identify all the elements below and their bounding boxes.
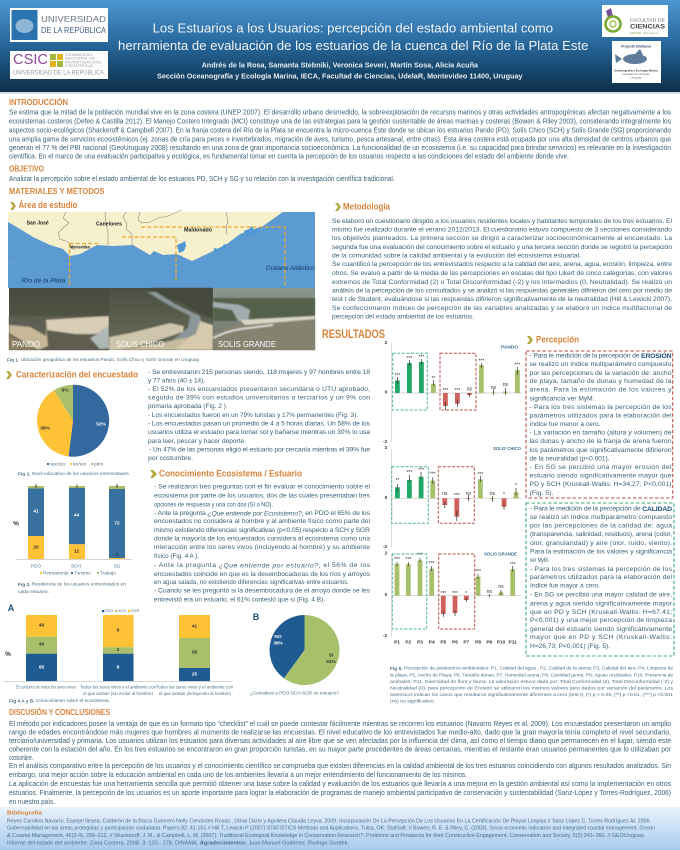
heading: Percepción: Percepción (536, 334, 579, 346)
axis labels: P1 to P11: P6 (452, 640, 458, 646)
panel: percepción de calidad: (transparencia, salinidad, residuos), arena (color, (530, 531, 672, 538)
logo: CSIC: CSIC (13, 52, 48, 68)
axis labels: P1 to P11: P8 (475, 640, 481, 646)
text block: conocimiento: físico (Fig. 4 A ). (154, 553, 199, 560)
bar chart: Fig 5 Solis Chico: ns (442, 491, 448, 497)
text block: conocimiento: interacción entre los seres vivos (incluyendo al hombre) y su ambiente (154, 544, 370, 551)
stacked bar chart: Fig 4 A: 56 (192, 650, 197, 656)
pie chart: Fig 4 B: 61% (326, 659, 337, 665)
title (118, 20, 588, 53)
panel: percepción de erosión: índice fue menor a cero. (530, 421, 601, 428)
panel: percepción de calidad: P<0,001) y una mejor percepción de limpieza (530, 617, 672, 624)
text block: metodología: test t de Student, evaluándose si las respuestas difirieron significativamente de la neutralidad (Hill & Lewicki 2007). (332, 296, 672, 303)
bar chart: Fig 5 Solis Grande: * (465, 591, 467, 597)
stacked bar chart: Fig 4 A: 65 (39, 664, 44, 670)
heading: bibliografía: Bibliografía (7, 810, 43, 816)
text block: introducción (9, 108, 671, 160)
caption: Fig 5: Neutralidad (0), para percepción de Erosión se utilizaron los mismos valores pero dados por variación del parámetro. Los (390, 686, 674, 690)
axis labels: P1 to P11: P9 (486, 640, 493, 646)
bar chart: Fig 3 residencia: 1 (116, 552, 119, 558)
text block: metodología (332, 218, 673, 320)
caption: Fig 1: Fig 1. Ubicación geográfica de los estuarios Pando, Solís Chico y Solís Grande en Uruguay. (7, 357, 200, 362)
caption: Fig 2: Fig 2. Nivel educativo de los usuarios entrevistados. (18, 471, 130, 476)
text block: metodología: Se elaboró un cuestionario dirigido a los usuarios residentes locales y habitantes temporales de los tres estuarios. El (332, 218, 672, 225)
panel: percepción de erosión: - En SG se percibió una mayor erosión del (530, 464, 672, 471)
pie chart: Fig 4 B: ¿Considera a PDO-SCH-SGR un estuario? (250, 690, 339, 696)
bar chart: Fig 3 residencia: 12 (74, 548, 79, 554)
text block: introducción: científica. En el marco de una evaluación participativa y ecológica, es fundamental tomar en cuenta la percepción de los usuarios respecto a las condiciones del estado del ambiente donde vive. (9, 152, 569, 160)
heading: Metodología: Metodología (343, 202, 391, 212)
axis labels: P1 to P11: P10 (497, 640, 506, 646)
bar chart: Fig 5 Solis Grande: 0 (385, 592, 388, 598)
bar chart: Fig 5 Pando: *** (454, 388, 460, 394)
bar chart: Fig 5 Pando: ns (503, 382, 509, 388)
logo: Universidad de la República: UNIVERSIDAD (41, 14, 106, 24)
bar chart: Fig 5 Pando (383, 340, 522, 445)
panel: percepción de calidad: que en PD y SCH (Kruskall-Wallis: H=67,41; (530, 609, 672, 616)
panel: percepción de calidad: mayor que en PD y SCH (Kruskall-Wallis: (530, 634, 672, 641)
text block: conocimiento (154, 484, 371, 604)
text block: conocimiento: opciones de respuesta y una con dos (SI o NO). (154, 502, 273, 508)
category labels: Fig 4 A (16, 684, 233, 696)
panel: percepción de calidad: - Para los tres sistemas la percepción de los (530, 566, 673, 573)
panel: percepción de erosión: PD y SCH (Kruskall-Wallis: H=34,27; P<0,001) (530, 481, 672, 488)
logo: Facultad de Ciencias: CIENCIAS (630, 24, 665, 30)
text block: metodología: Se confeccionaron índices de percepción de las variables analizadas y se elaboró un índice multifactorial de (332, 305, 672, 312)
panel: percepción de erosión: arena. Para la estimación de los valores y (530, 386, 672, 394)
bar chart: Fig 5 Solis Grande: -2 (383, 633, 387, 639)
panel: percepción de erosión: por las percepciones de la variación de: ancho (530, 370, 672, 377)
bar chart: Fig 5 Pando: ns (467, 386, 473, 392)
bar chart: Fig 5 Solis Chico: * (503, 492, 505, 498)
bar chart: Fig 5 Solis Chico: *** (418, 468, 424, 474)
text block: metodología: de la comunidad sobre la calidad ambiental y la evolución del ecosistema estuarial. (332, 252, 581, 260)
text block: references: Informe del estado del ambiente. Zona Costera. 2008. 3: 120 - 176, DINAMA. Agradecimientos: Juan Manuel Gutiérrez, Rodrigo Gurdek. (7, 840, 349, 846)
text block: conocimiento: - Ante la pregunta ¿Que entiende por Ecosistemo?, en PDO el 65% de los (154, 510, 371, 517)
logo: CSIC (10, 51, 108, 79)
bar chart: Fig 3 residencia: 72 (114, 520, 120, 526)
panel: percepción de erosión: las dunas y ancho de la franja de arena fueron (530, 438, 672, 445)
caption: Fig 5: Fig 5. Percepción de parámetros ambientales: P1, Calidad del agua ; P2, Calidad de la arena; P3, Calidad del aire; P4, Limpieza de (390, 666, 673, 670)
panel: percepción de calidad: por las percepciones de la calidad de: agua (530, 522, 672, 530)
logo: Facultad de Ciencias (602, 5, 668, 37)
category labels: Fig 4 A: Todos los seres vivos y el ambiente con (156, 684, 233, 690)
panel: percepción de calidad: Para la estimación de los valores y significancia (530, 548, 672, 556)
stacked bar chart: Fig 4 A (4, 603, 233, 696)
bar chart: Fig 5 Pando: 0 (385, 390, 388, 396)
legend: pie: sec/utu (50, 462, 66, 466)
bar chart: Fig 5 Solis Chico (383, 445, 522, 550)
bar chart: Fig 5 Pando: *** (442, 388, 448, 394)
text block: caracterización: - Los encuestados fueron en un 79% turistas y 17% permanentes (Fig. 3). (148, 412, 358, 419)
text block: caracterización: y 77 años (40 ± 14). (148, 378, 205, 384)
heading: Caracterización del encuestado: Caracterización del encuestado (16, 370, 138, 380)
logo: CSIC: UNIVERSIDAD DE LA REPÚBLICA (13, 70, 104, 76)
authors and affiliation: Andrés de la Rosa, Samanta Stebniki, Veronica Severi, Martín Sosa, Alicia Acuña (202, 60, 479, 70)
legend: Fig 3 (40, 570, 116, 576)
bar chart: Fig 5 Solis Chico: *** (430, 472, 436, 478)
stacked bar chart: Fig 4 A: 2 (117, 647, 120, 653)
bar chart: Fig 5 Solis Grande: *** (440, 591, 446, 597)
logo: Proyecto fish: Uruguay (631, 76, 642, 80)
caption: Fig 5 (390, 666, 674, 704)
logo: Proyecto fish: Oceanografía y Ecología Marina (614, 68, 658, 72)
bar chart: Fig 3 residencia: 3 (116, 484, 119, 490)
stacked bar chart: Fig 4 A: 9 (117, 628, 120, 634)
text block: discusión: embargo, una mejor acción sobre la educación ambiental en cada uno de los ambientes llevaría a un mejor entendimiento del funcionamiento de los mismos. (9, 770, 467, 779)
category labels: Fig 4 A: el que actúan (incluyendo al hombre) (159, 691, 231, 696)
bar chart: Fig 5 Solis Chico: * (515, 483, 517, 489)
logo: CSIC: SECTORIAL DE (65, 57, 96, 61)
bar chart: Fig 3 residencia: SCH (71, 564, 81, 568)
text block: references (7, 818, 655, 846)
bar chart: Fig 5 Solis Grande: *** (475, 569, 481, 575)
bar chart: Fig 5 Solis Chico: *** (477, 472, 483, 478)
text block: references: Reyes Carolina Navarro, Espejel Ileana, Calderón de la Barca Guerrero Nelly Cervantes Rosas , Omar Darío y Aguilera Claudia Leyva. 2009. Incorporación De La Percepción De Los Usuarios En La Certificación De Playas Limpias // Sanz López C, Torres Rodríguez AI. 2006. (7, 818, 651, 824)
text block: caracterización: por costumbre. (148, 455, 193, 462)
panel: percepción de calidad: olor, granularidad) y aire (olor, ruido, viento). (530, 540, 672, 547)
text block: caracterización: seguido de 39% con estudios universitarios o terciarios y un 9% con (148, 394, 370, 402)
heading: Introducción: INTRODUCCIÓN (9, 96, 68, 107)
bar chart: Fig 3 residencia: 2 (35, 484, 38, 490)
caption: Fig 5: asteriscos indican los casos que resultaron significativamente diferentes a cero (test-t). (*) p < 0.05; (**) p <0.01; (***) p <0.001 (390, 692, 673, 697)
panel: percepción de erosión: de playa, tamaño de dunas y humedad de la (530, 378, 672, 385)
bar chart: Fig 5 Solis Chico: ** (395, 478, 399, 484)
text block: conocimiento: - Cuando se les preguntó si la desembocadura de el arroyo donde se les (154, 588, 371, 594)
caption: Fig 5: la playa; P5, Ancho de Playa; P6, Tamaño dunas; P7, Humedad arena; P8, Cantidad gente; P9, Aguas residuales; P10, Presencia de (390, 672, 673, 678)
bar chart: Fig 5 Solis Grande: *** (394, 557, 400, 563)
bar chart: Fig 5 Solis Grande: ns (487, 589, 492, 595)
photo: Solis Chico (109, 288, 213, 350)
text block: caracterización: - Un 47% de las personas eligió el estuario por cercanía mientras el 39% fue (149, 446, 370, 454)
text block: conocimiento: donde la mayoría de los encuestados considera al ecosistema como una (154, 536, 370, 542)
bar chart: Fig 5 Solis Chico: ns (466, 491, 472, 497)
caption: Fig 3: cada estuario. (18, 589, 49, 594)
bar chart: Fig 3 residencia: 41 (33, 508, 39, 514)
axis labels: P1 to P11: P11 (509, 640, 517, 646)
text block: metodología: mismo fue realizado durante el verano 2012/2013. El cuestionario estuvo compuesto de 3 secciones considerando (332, 226, 672, 234)
bar chart: Fig 5 Pando: *** (418, 354, 424, 360)
legend: pie: ter/uni (73, 462, 86, 466)
panel: percepción de erosión: los parámetros que significativamente difirieron (530, 447, 672, 454)
logo: Proyecto fish: Proyecto Ictiofauna (621, 44, 651, 48)
text block: conocimiento: encuestados no considera al hombre y al ambiente físico como parte del (154, 518, 370, 525)
bar chart: Fig 5 Solis Grande: SOLIS GRANDE (484, 552, 518, 558)
bar chart: Fig 5 Solis Grande: *** (429, 561, 435, 567)
panel: bibliografía (0, 807, 680, 850)
axis labels: P1 to P11: P4 (429, 640, 435, 646)
text block: metodología: los objetivos planteados. La primera sección se dirigió a caracterizar socioeconómicamente al encuestado. La (332, 235, 672, 242)
text block: conocimiento: mismo existiendo diferencias significativas (p<0.05) respecto a SCH y SGR (154, 527, 370, 534)
text block: conocimiento: encuestados coincide en que es la desembocaduras de los ríos y arroyos (154, 571, 371, 578)
logo: CSIC: COMISIÓN (65, 52, 93, 57)
pie chart: nivel educativo: 52% (96, 422, 107, 428)
text block: metodología: análisis de la percepción de los consultados y se analizó si las respuestas generales difirieron del cero por medio de (332, 288, 672, 294)
bar chart: Fig 5 Solis Grande (383, 550, 522, 646)
title: herramienta de evaluación de los estuarios de la cuenca del Río de la Plata Este (118, 38, 588, 53)
panel: percepción de calidad: índice fue mayor a cero. (530, 582, 600, 590)
stacked bar chart: Fig 4 A: 41 (192, 624, 197, 630)
panel: percepción de erosión: parámetros utilizados para la elaboración del (530, 412, 672, 420)
text block: conocimiento: - Se realizaron tres preguntas con el fin evaluar el conocimiento sobre el (154, 484, 370, 490)
legend: pie: prim (94, 462, 103, 466)
text block: conocimiento: en agua salada, no existiendo diferencias significativas entre estuarios. (154, 579, 349, 586)
legend: Fig 3: Turismo (74, 570, 91, 576)
pie chart: Fig 4 B: NO (274, 634, 282, 640)
photo labels (12, 339, 276, 349)
bar chart: Fig 5 Solis Grande: *** (452, 591, 458, 597)
bar chart: Fig 3 residencia (13, 484, 132, 576)
text block: caracterización: para leer, pescar y hacer deporte. (148, 438, 246, 445)
panel: percepción de erosión: - Para le medición de la percepción de EROSIÓN (530, 350, 672, 360)
logo: Proyecto fish (612, 41, 661, 83)
heading: Discusión y conclusiones: DISCUSIÓN Y CONCLUSIONES (9, 706, 110, 717)
bar chart: Fig 5 Pando: ** (431, 376, 435, 382)
legend: Fig 4 A: PDO (105, 609, 113, 613)
caption: Fig 4: Fig 4 A y B. Conocimiento sobre el ecosistema. (9, 698, 110, 703)
bar chart: Fig 5 Solis Grande: ns (498, 584, 504, 590)
text block: references: & Coastal Management, 46(3-4), 299–312. // Shackeroff, J. M., & Campbell, L. M. (2007). Traditional Ecological Knowledge in Conservation Research?: Problems and Prospects for their Constructive Engagement. Conservation and Society, 5(3):343–360. // GEOUruguay. (7, 833, 645, 839)
bar chart: Fig 5 Solis Chico: -2 (383, 544, 387, 550)
text block: conocimiento: entrevistó era un estuario, el 61% contestó que si (Fig. 4 B). (154, 596, 325, 604)
photo labels: SOLIS GRANDE (218, 339, 276, 349)
map labels: 35°S (10, 262, 18, 266)
text block: caracterización: usuarios utiliza el estuario para tomar sol y bañarse mientras un 30% lo usa (148, 429, 370, 436)
text block: metodología: percepción del estado ambiental de los estuarios. (332, 313, 474, 320)
pie chart: nivel educativo: 39% (40, 426, 51, 432)
photo labels: SOLIS CHICO (116, 339, 164, 349)
pie chart: Fig 4 B: B (253, 612, 260, 622)
bar chart: Fig 5 Solis Grande: *** (510, 562, 516, 568)
heading: Resultados: RESULTADOS (322, 329, 385, 341)
bar chart: Fig 5 Solis Chico: *** (406, 470, 412, 476)
caption: Fig 3 (18, 582, 126, 594)
caption: Fig 3: Fig 3. Residencia de los usuarios entrevistados en (18, 582, 126, 586)
legend: Fig 4 A: SGR (131, 609, 139, 613)
photos: estuaries (9, 288, 315, 350)
map labels (10, 220, 315, 284)
photo labels: PANDO (12, 339, 40, 349)
bar chart: Fig 5 Pando: *** (394, 373, 400, 379)
panel: percepción de erosión: - Para los tres sistemas la percepción de los (530, 404, 672, 411)
panel: percepción de erosión: - La variación en tamaño (altura y volumen) de (530, 430, 672, 436)
text block: metodología: extremos de Total Conformidad (2) o Total Disconformidad (-2) y los intermedios (0, Neutralidad). Se realizó un (332, 279, 672, 286)
text block: references: Gobernabilidad en las áreas protegidas y participación ciudadana. Papers 82: 41-161 // Hill T, Lewicki P (2007) STATISTICS Methods and Applications. Tulsa, OK: StatSoft. // Bowen, R. E. & Riley, C. (2003). Socio-economic indicators and integrated coastal management. Ocean (7, 826, 655, 832)
caption: Fig 5: (ns) no significativo. (390, 698, 435, 704)
bar chart: Fig 5 Solis Chico: 2 (385, 445, 388, 451)
text block: caracterización: - Los encuestados pasan un promedio de 4 a 5 horas diarias. Un 58% de los (148, 420, 371, 428)
panel: percepción de erosión: de la neutralidad (p<0.001). (530, 456, 610, 462)
map labels: Río de la Plata (22, 278, 66, 284)
bar chart: Fig 3 residencia: 1 (76, 484, 79, 490)
bar chart: Fig 5 Pando: ns (491, 385, 497, 391)
map labels: Canelones (96, 222, 122, 228)
map: study area (8, 210, 315, 288)
logo: Universidad de la República (10, 8, 108, 42)
stacked bar chart: Fig 4 A: 25 (192, 672, 197, 678)
pie chart: Fig 4 B (250, 612, 339, 696)
text block: conocimiento: - Ante la pregunta ¿Que entiende por estuario?, el 56% de los (154, 562, 371, 569)
text block: discusión (9, 719, 672, 806)
bar chart: Fig 3 residencia: PDO (31, 564, 41, 568)
bar chart: Fig 3 residencia: SG (114, 564, 121, 568)
bar chart: Fig 5 Pando: PANDO (501, 344, 518, 350)
text block: caracterización (148, 369, 371, 462)
photo: Pando (9, 288, 109, 350)
panel: percepción de calidad: general del estuario siendo significativamente (530, 626, 672, 633)
bar chart: Fig 5 Pando: 2 (385, 340, 388, 346)
pie chart: Fig 4 B: 39% (273, 640, 284, 646)
bar chart: Fig 3 residencia: 20 (33, 544, 39, 550)
authors and affiliation (157, 60, 523, 80)
map labels: Océano Atlántico (266, 265, 315, 272)
panel: percepción de calidad: parámetros utilizados para la elaboración del (530, 574, 672, 581)
panel: percepción de erosión: estuario siendo significativamente mayor que (530, 472, 672, 480)
category labels: Fig 4 A: el que actúan (sin incluir al hombre) (83, 691, 153, 696)
caption: Fig 5: animales; P11, Diversidad de flora y fauna. La valoración estuvo dada por: Total Conformidad (2), Total Disconformidad (-2) y (390, 679, 674, 684)
pie chart: nivel educativo (37, 385, 109, 466)
panel: percepción de calidad: ver MyM. (530, 557, 549, 564)
heading: Objetivo: OBJETIVO (9, 164, 44, 174)
axis labels: P1 to P11: P2 (405, 640, 412, 646)
text block: caracterización: - Se entrevistaron 215 personas siendo, 118 mujeres y 97 hombres entre 18 (148, 369, 370, 376)
text block: discusión: en nuestro país. (9, 797, 55, 806)
dashed location markers (70, 227, 285, 285)
category labels: Fig 4 A: Todos los seres vivos y el ambiente con (80, 684, 156, 690)
pie chart: nivel educativo: 9% (62, 388, 69, 394)
panel: percepción de calidad: - En SG se percibió una mayor calidad de aire, (530, 592, 672, 598)
legend: Fig 4 A: SCH (118, 609, 126, 613)
bar chart: Fig 5 Solis Chico: *** (454, 493, 460, 499)
category labels: Fig 4 A: El conjunto de todos los seres vivos (16, 684, 77, 690)
text block: metodología: segunda fue una evaluación del conocimiento sobre el estuario y una tercera sección donde se registró la percepción (332, 244, 672, 251)
title: Los Estuarios a los Usuarios: percepción del estado ambiental como (153, 20, 553, 36)
stacked bar chart: Fig 4 A: 40 (39, 642, 44, 648)
map labels: Maldonado (184, 228, 212, 234)
panel: percepción de erosión (526, 350, 673, 498)
bar chart: Fig 5 Solis Chico: SOLIS CHICO (493, 446, 521, 452)
panel: percepción de calidad (526, 503, 674, 656)
bar chart: Fig 3 residencia: 44 (74, 512, 79, 518)
heading: Conocimiento Ecosistema / Estuario: Conocimiento Ecosistema / Estuario (159, 468, 302, 480)
panel: percepción de erosión: (Fig. 5). (530, 490, 554, 497)
bar chart: Fig 5 Solis Chico: 0 (385, 495, 388, 501)
text block: conocimiento: ecosistema por parte de los usuarios, dos de las cuales presentaban tres (154, 492, 371, 500)
text block: metodología: Se cuantificó la percepción de los entrevistados respecto a la calidad del aire, arena, agua, erosión, limpieza, entre (332, 261, 672, 268)
legend: Fig 4 A (102, 609, 139, 613)
bar chart: Fig 5 Pando: *** (514, 362, 520, 368)
stacked bar chart: Fig 4 A: % (5, 651, 11, 658)
logo: CSIC: INVESTIGACIÓN (65, 59, 102, 64)
bar chart: Fig 5 Solis Grande: *** (405, 557, 411, 563)
heading: Materiales y métodos: MATERIALES Y MÉTODOS (9, 186, 105, 196)
bar chart: Fig 5 Solis Chico: ns (490, 491, 496, 497)
logo: Proyecto fish: Facultad de Ciencias (622, 72, 650, 76)
bar chart: Fig 5 Pando: -2 (383, 439, 387, 445)
legend: Fig 3: Permanente (43, 570, 69, 576)
axis labels: P1 to P11: P3 (417, 640, 423, 646)
logo: Facultad de Ciencias: UDELAR · fcien.edu.uy (630, 31, 659, 35)
bar chart: Fig 5 Solis Grande: 2 (385, 550, 388, 556)
panel: percepción de calidad: arena y agua siendo significativamente mayor (530, 600, 673, 608)
panel: percepción de calidad: H=26,73; P<0,001) (Fig. 5). (530, 643, 610, 650)
logo: Universidad de la República: DE LA REPÚBLICA (41, 25, 106, 35)
logo: CSIC: CIENTÍFICA (65, 64, 94, 68)
text block: caracterización: primaria aprobada (Fig. 2 ) (148, 403, 226, 410)
text block: discusión: rango de edades encontrándose más mujeres que hombres al momento de realizarse las encuestas. El nivel educativo de los entrevistados fue medio-alto, dado que la gran mayoría tenía completo el nivel secundario, (9, 728, 671, 736)
legend: pie (47, 462, 103, 466)
panel: percepción de erosión: se realizó un índice multiparámetro compuesto (530, 361, 672, 368)
stacked bar chart: Fig 4 A: 49 (39, 622, 44, 628)
map labels: Montevideo (70, 244, 90, 250)
legend: Fig 3: Trabajo (100, 570, 116, 576)
panel: percepción de calidad: se realizó un índice multiparámetro compuesto (530, 514, 672, 521)
photo: Solis Grande (213, 288, 315, 350)
text block: caracterización: - El 52% de los encuestados presentaron secundaria o UTU aprobado, (148, 386, 370, 393)
axis labels: P1 to P11: P5 (440, 640, 447, 646)
authors and affiliation: Sección Oceanografía y Ecología Marina, IECA, Facultad de Ciencias, UdelaR, Montevideo 11400, Uruguay (157, 72, 523, 80)
axis labels: P1 to P11: P7 (463, 640, 470, 646)
panel: percepción de erosión: significancia ver MyM. (530, 396, 595, 402)
stacked bar chart: Fig 4 A: 8 (117, 664, 120, 670)
heading: Área de estudio (10, 199, 78, 211)
heading: Área de estudio: Área de estudio (18, 199, 78, 211)
pie chart: Fig 4 B: SI (329, 652, 334, 658)
bar chart: Fig 5 Pando: *** (406, 356, 412, 362)
header band (0, 0, 680, 94)
text block: metodología: otros. Se evaluó a partir de la media de las percepciones en escalas del tipo Likert de cinco categorías, con valores (332, 270, 673, 277)
bar chart: Fig 5 Solis Grande: *** (417, 552, 423, 558)
stacked bar chart: Fig 4 A: A (8, 603, 15, 613)
bar chart: Fig 3 residencia: % (13, 520, 19, 528)
panel: percepción de calidad: - Para le medición de la percepción de CALIDAD (530, 506, 672, 512)
axis labels: P1 to P11 (394, 640, 517, 646)
map labels: San José (27, 220, 49, 226)
text block: objetivo: Analizar la percepción sobre el estado ambiental de los estuarios PD, SCH y SG y su relación con la investigación científica tradicional. (9, 174, 395, 183)
text block: discusión: costumbre. (9, 753, 33, 762)
logo: Facultad de Ciencias: FACULTAD DE (630, 18, 665, 22)
axis labels: P1 to P11: P1 (394, 640, 400, 646)
bar chart: Fig 5 Pando: *** (478, 358, 484, 364)
